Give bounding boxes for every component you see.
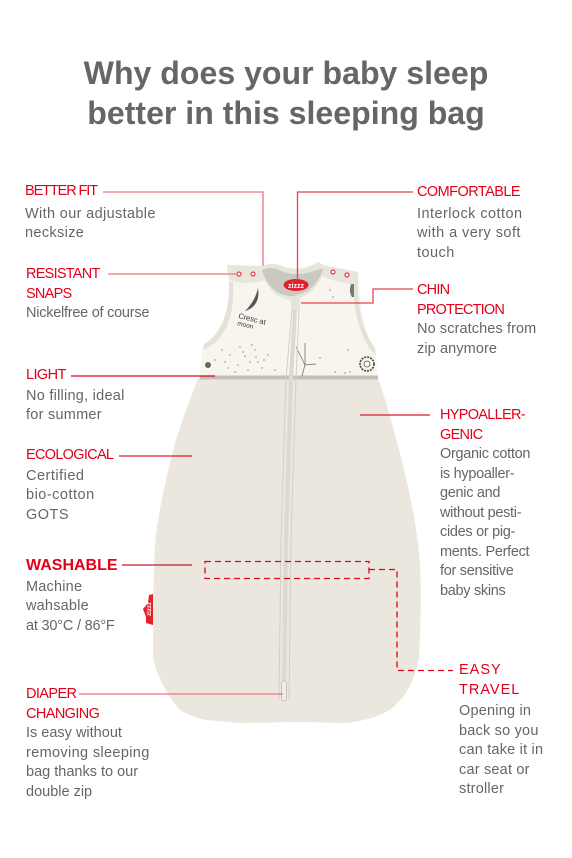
callout: hypoallergenic: HYPOALLER- — [440, 407, 525, 423]
callout: diaper changing: removing sleeping — [26, 744, 150, 760]
callout: hypoallergenic — [440, 407, 530, 598]
callout: chin protection — [417, 282, 536, 356]
callout: resistant snaps: RESISTANT — [26, 266, 100, 282]
callout: easy travel: can take it in — [459, 742, 543, 758]
callout: comfortable — [417, 184, 523, 260]
callout: chin protection: zip anymore — [417, 340, 497, 356]
callout: hypoallergenic: cides or pig- — [440, 524, 515, 540]
callout: chin protection: PROTECTION — [417, 302, 504, 318]
callout: hypoallergenic: baby skins — [440, 582, 506, 598]
callout: hypoallergenic: genic and — [440, 485, 500, 501]
callout: ecological: ECOLOGICAL — [26, 447, 113, 463]
prints — [245, 288, 258, 311]
callout: easy travel: Opening in — [459, 703, 531, 719]
callout: comfortable: Interlock cotton — [417, 206, 523, 222]
callout: hypoallergenic: Organic cotton — [440, 446, 530, 462]
callout: comfortable: with a very soft — [417, 225, 521, 241]
callout: diaper changing: CHANGING — [26, 706, 99, 722]
callout: ecological: bio-cotton — [26, 487, 95, 503]
callout: diaper changing — [26, 686, 150, 800]
callout: washable — [26, 557, 118, 634]
bodice — [200, 262, 378, 380]
callout: better fit — [25, 183, 156, 241]
title: Why does your baby sleep — [84, 55, 488, 91]
callout: easy travel: EASY — [459, 662, 502, 678]
callout: ecological — [26, 447, 114, 522]
callout: better fit: BETTER FIT — [25, 183, 97, 199]
callout: light — [26, 367, 125, 423]
bodice: Cresc at — [238, 311, 268, 327]
callout: comfortable: COMFORTABLE — [417, 184, 520, 200]
callout: light: No filling, ideal — [26, 388, 125, 404]
callout: diaper changing: double zip — [26, 784, 92, 800]
callout: hypoallergenic: for sensitive — [440, 563, 513, 579]
bag body — [153, 378, 421, 723]
callout: diaper changing: Is easy without — [26, 725, 122, 741]
logo tag — [284, 279, 308, 291]
callout: hypoallergenic: without pesti- — [440, 504, 521, 520]
callout: light: for summer — [26, 407, 102, 423]
callout: easy travel: stroller — [459, 781, 504, 797]
callout: resistant snaps — [26, 266, 149, 321]
side logo tag — [143, 594, 153, 625]
callout: washable: Machine — [26, 578, 82, 594]
callout: washable: WASHABLE — [26, 557, 118, 574]
callout: ecological: GOTS — [26, 506, 69, 522]
callout: easy travel — [459, 662, 543, 797]
callout: light: LIGHT — [26, 367, 66, 383]
callout: diaper changing: DIAPER — [26, 686, 76, 702]
waist band — [200, 376, 378, 380]
callout: diaper changing: bag thanks to our — [26, 764, 138, 780]
callout: resistant snaps: SNAPS — [26, 286, 71, 302]
callout: comfortable: touch — [417, 244, 455, 260]
callout: hypoallergenic: GENIC — [440, 426, 482, 442]
title — [84, 55, 488, 131]
callout: chin protection: CHIN — [417, 282, 449, 298]
title: better in this sleeping bag — [87, 95, 485, 131]
callout: better fit: With our adjustable — [25, 206, 156, 222]
callout: hypoallergenic: is hypoaller- — [440, 466, 514, 482]
zipper — [279, 296, 300, 701]
side logo tag: zizzz — [147, 602, 153, 616]
callout: better fit: necksize — [25, 225, 84, 241]
callout: washable: at 30°C / 86°F — [26, 618, 115, 634]
callout: chin protection: No scratches from — [417, 321, 536, 337]
callout: easy travel: back so you — [459, 722, 539, 738]
snaps — [237, 272, 241, 276]
logo tag: zizzz — [288, 283, 304, 290]
callout: easy travel: car seat or — [459, 762, 530, 778]
callout lines — [71, 192, 453, 694]
callout: resistant snaps: Nickelfree of course — [26, 305, 149, 321]
bodice: moon — [237, 320, 254, 331]
callout: hypoallergenic: ments. Perfect — [440, 544, 529, 560]
callout: ecological: Certified — [26, 468, 84, 484]
callout: easy travel: TRAVEL — [459, 682, 520, 698]
collar — [260, 262, 326, 300]
callout: washable: wahsable — [26, 598, 89, 614]
